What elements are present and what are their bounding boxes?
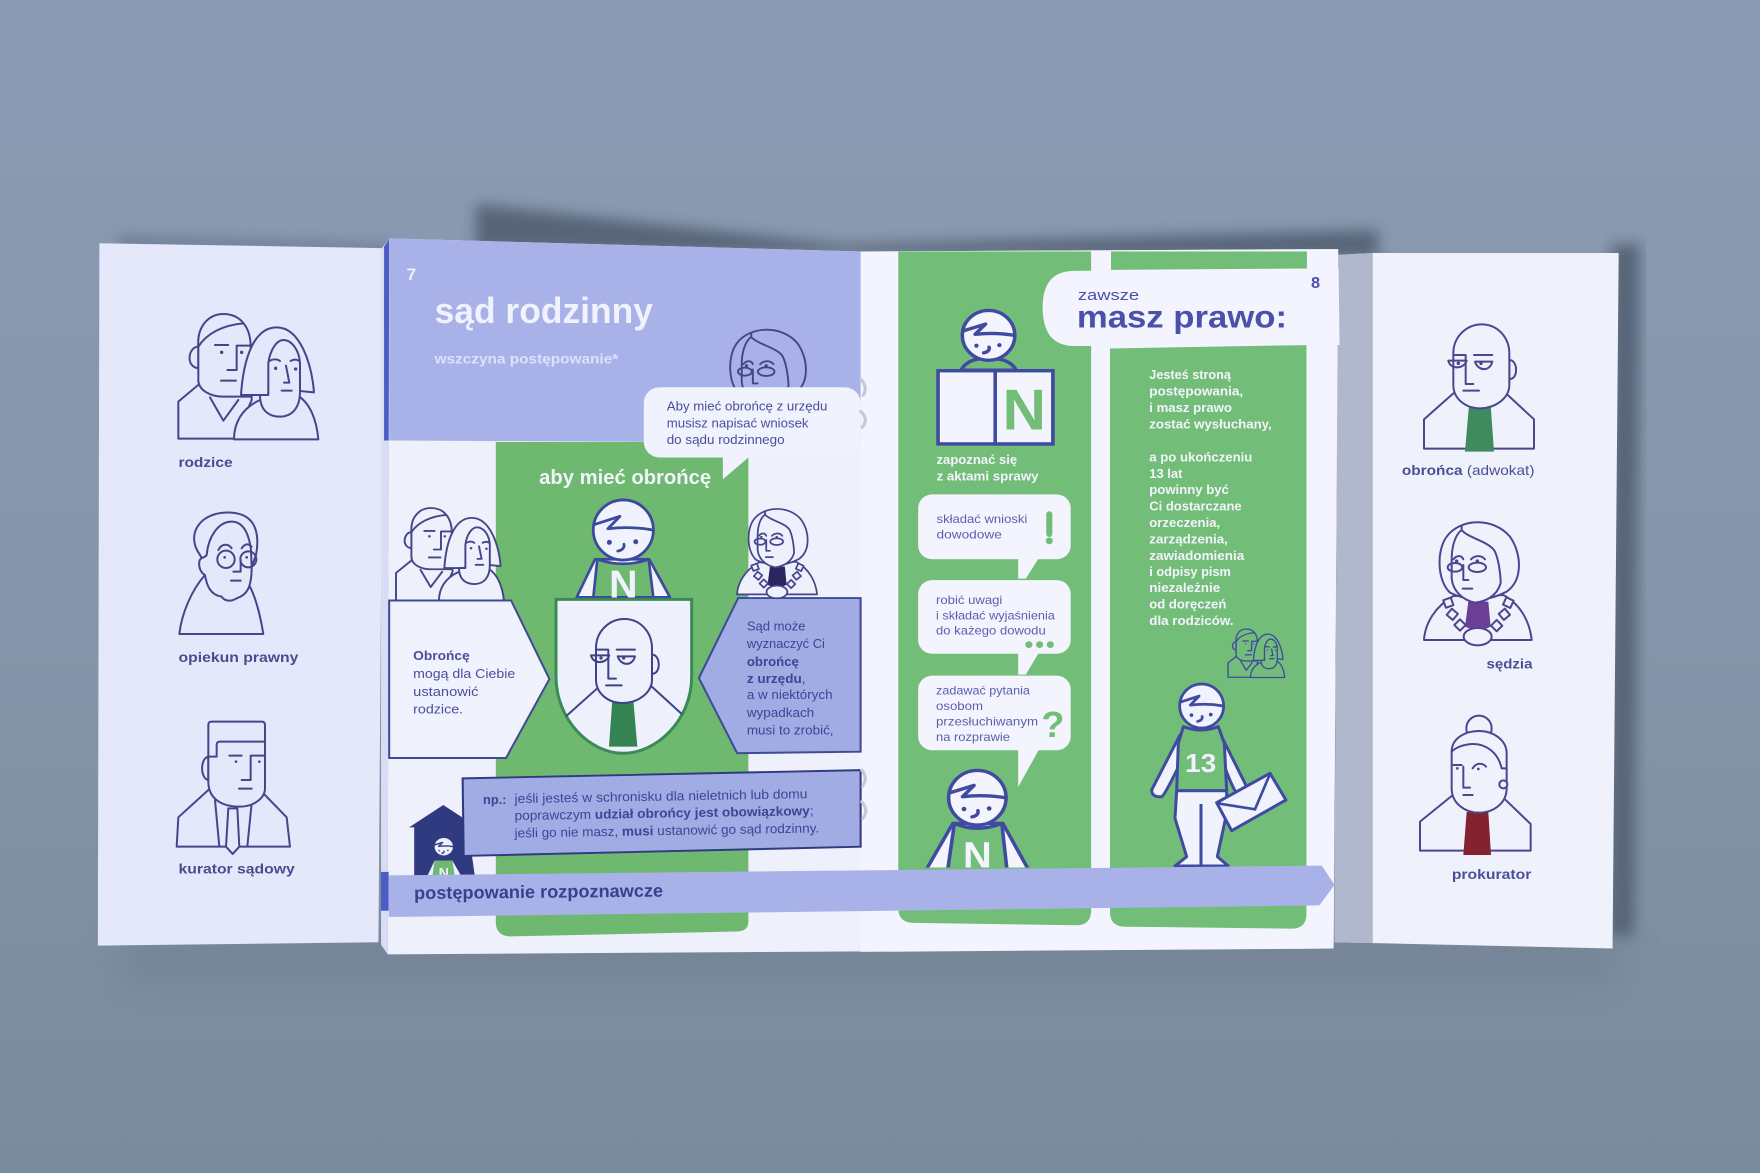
panel: parents hexagon: mogą dla Ciebie xyxy=(413,666,515,681)
cast shadows xyxy=(118,204,1640,975)
icon: boy with N shirt above shield xyxy=(577,500,670,606)
text: zapoznać się z aktami sprawy: z aktami sprawy xyxy=(937,469,1039,483)
icon: lawyer xyxy=(1424,324,1534,452)
label: opiekun prawny: opiekun prawny xyxy=(178,650,298,666)
panel: example callout xyxy=(463,770,861,856)
panel: court hexagon: musi to zrobić, xyxy=(747,723,834,738)
panel: parents hexagon xyxy=(389,600,549,758)
icon: probation officer xyxy=(177,722,290,854)
panel: central spread xyxy=(381,238,1338,954)
icon: boy at bottom of column: N xyxy=(963,835,992,877)
panel: court hexagon: Sąd może xyxy=(747,619,806,633)
icon: judge in header xyxy=(715,330,818,444)
speech bubble: składać wnioski xyxy=(918,494,1071,579)
heading: zawsze masz prawo: zawsze xyxy=(1078,287,1139,304)
panel: court hexagon: z urzędu, xyxy=(747,671,806,686)
label: prokurator: prokurator xyxy=(1452,867,1532,882)
staples xyxy=(861,379,866,819)
icon: boy aged 13 with envelope xyxy=(1152,684,1286,866)
text: right to be heard: 13 lat xyxy=(1149,466,1183,481)
subtitle: wszczyna postępowanie* xyxy=(433,351,619,366)
icon: boy reading book xyxy=(938,310,1053,444)
icon: boy with N shirt above shield: N xyxy=(609,562,638,606)
label: kurator sądowy: kurator sądowy xyxy=(178,862,295,877)
heading: zawsze masz prawo xyxy=(1043,268,1340,346)
text: right to be heard: postępowania, xyxy=(1149,384,1243,398)
text: right to be heard: a po ukończeniu xyxy=(1149,450,1252,464)
panel: green column xyxy=(496,442,748,936)
label: rodzice: rodzice xyxy=(178,456,233,471)
bottom arrow band: postępowanie rozpoznawcze: postępowanie rozpoznawcze xyxy=(414,880,663,903)
speech bubble: request to family court: do sądu rodzinnego xyxy=(667,432,785,447)
panel: parents hexagon: ustanowić xyxy=(413,684,479,699)
icon: legal guardian xyxy=(179,512,263,634)
text: right to be heard: dla rodziców. xyxy=(1149,614,1233,628)
icon: boy at bottom of column xyxy=(926,770,1028,877)
speech bubble: zadawać pytania: zadawać pytania xyxy=(936,684,1030,697)
icon: shield with lawyer xyxy=(556,599,692,753)
icon: parents outline on green xyxy=(1228,629,1285,678)
speech bubble: robić uwagi: robić uwagi xyxy=(936,593,1002,607)
text: right to be heard: niezależnie xyxy=(1149,581,1220,595)
text: right to be heard: zawiadomienia xyxy=(1149,548,1245,563)
text: right to be heard xyxy=(1149,367,1272,628)
text: right to be heard: zarządzenia, xyxy=(1149,532,1228,546)
panel: green columns on right page xyxy=(898,252,1340,929)
panel: court hexagon: obrońcę xyxy=(747,654,799,669)
panel: court hexagon xyxy=(699,598,861,753)
speech bubble: zadawać pytania: na rozprawie xyxy=(936,730,1010,744)
page number 8: 8 xyxy=(1311,275,1320,292)
text: right to be heard: powinny być xyxy=(1149,482,1229,497)
text: right to be heard: orzeczenia, xyxy=(1149,515,1220,530)
label: obrońca (adwokat): obrońca (adwokat) xyxy=(1402,462,1534,478)
speech bubble: robić uwagi xyxy=(918,580,1071,675)
title: sąd rodzinny: sąd rodzinny xyxy=(435,291,653,331)
speech bubble: składać wnioski: składać wnioski xyxy=(937,512,1027,526)
panel: parents hexagon: Obrońcę xyxy=(413,648,470,663)
text: right to be heard: od doręczeń xyxy=(1149,597,1226,612)
icon: parents small xyxy=(396,508,504,601)
icon: boy reading book: N xyxy=(1003,379,1046,442)
bottom arrow band: postępowanie rozpoznawcze xyxy=(381,866,1335,917)
panel: court hexagon: wyznaczyć Ci xyxy=(746,636,825,651)
icon: parents xyxy=(178,314,318,439)
text: right to be heard: Jesteś stroną xyxy=(1149,367,1232,382)
panel: court hexagon: wypadkach xyxy=(746,705,814,720)
panel: right flap xyxy=(1334,253,1619,949)
speech bubble: zadawać pytania: osobom xyxy=(936,699,983,713)
panel: example callout: poprawczym udział obrońcy jest obowiązkowy; xyxy=(514,803,814,823)
icon: prosecutor xyxy=(1420,716,1531,855)
speech bubble: request to family court xyxy=(644,387,861,479)
panel: court hexagon: a w niektórych xyxy=(747,687,833,702)
icon: judge xyxy=(1424,522,1532,645)
text: right to be heard: i odpisy pism xyxy=(1149,565,1231,579)
text: right to be heard: zostać wysłuchany, xyxy=(1149,417,1272,431)
panel: left flap xyxy=(98,243,384,946)
speech bubble: zadawać pytania xyxy=(918,676,1071,787)
heading: aby mieć obrońcę: aby mieć obrońcę xyxy=(539,467,711,489)
text: zapoznać się z aktami sprawy xyxy=(937,452,1039,483)
icon: judge beside boy xyxy=(737,509,817,598)
text: zapoznać się z aktami sprawy: zapoznać się xyxy=(937,452,1017,467)
panel: example callout: jeśli jesteś w schronisku dla nieletnich lub domu xyxy=(513,787,808,806)
speech bubble: zadawać pytania: ? xyxy=(1041,705,1064,745)
panel: example callout: jeśli go nie masz, musi ustanowić go sąd rodzinny. xyxy=(513,821,819,840)
speech bubble: request to family court: musisz napisać wniosek xyxy=(667,416,809,430)
speech bubble: request to family court: Aby mieć obrońcę z urzędu xyxy=(667,399,827,413)
icon: shelter house with boy xyxy=(409,805,475,881)
icon: boy aged 13 with envelope: 13 xyxy=(1185,748,1216,778)
speech bubble: robić uwagi: do każego dowodu xyxy=(936,624,1046,637)
panel: example callout: np.: xyxy=(483,792,507,807)
page number 7: 7 xyxy=(407,265,416,284)
speech bubble: robić uwagi: i składać wyjaśnienia xyxy=(936,609,1055,622)
label: sędzia: sędzia xyxy=(1487,656,1533,671)
icon: shelter house with boy: N xyxy=(439,865,449,881)
speech bubble: zadawać pytania: przesłuchiwanym xyxy=(936,715,1038,728)
text: right to be heard: Ci dostarczane xyxy=(1149,499,1242,513)
text: right to be heard: i masz prawo xyxy=(1149,400,1232,415)
heading: zawsze masz prawo: masz prawo: xyxy=(1077,299,1287,334)
panel: parents hexagon: rodzice. xyxy=(413,702,463,716)
panel: purple header xyxy=(389,238,861,443)
speech bubble: składać wnioski: dowodowe xyxy=(937,528,1002,541)
